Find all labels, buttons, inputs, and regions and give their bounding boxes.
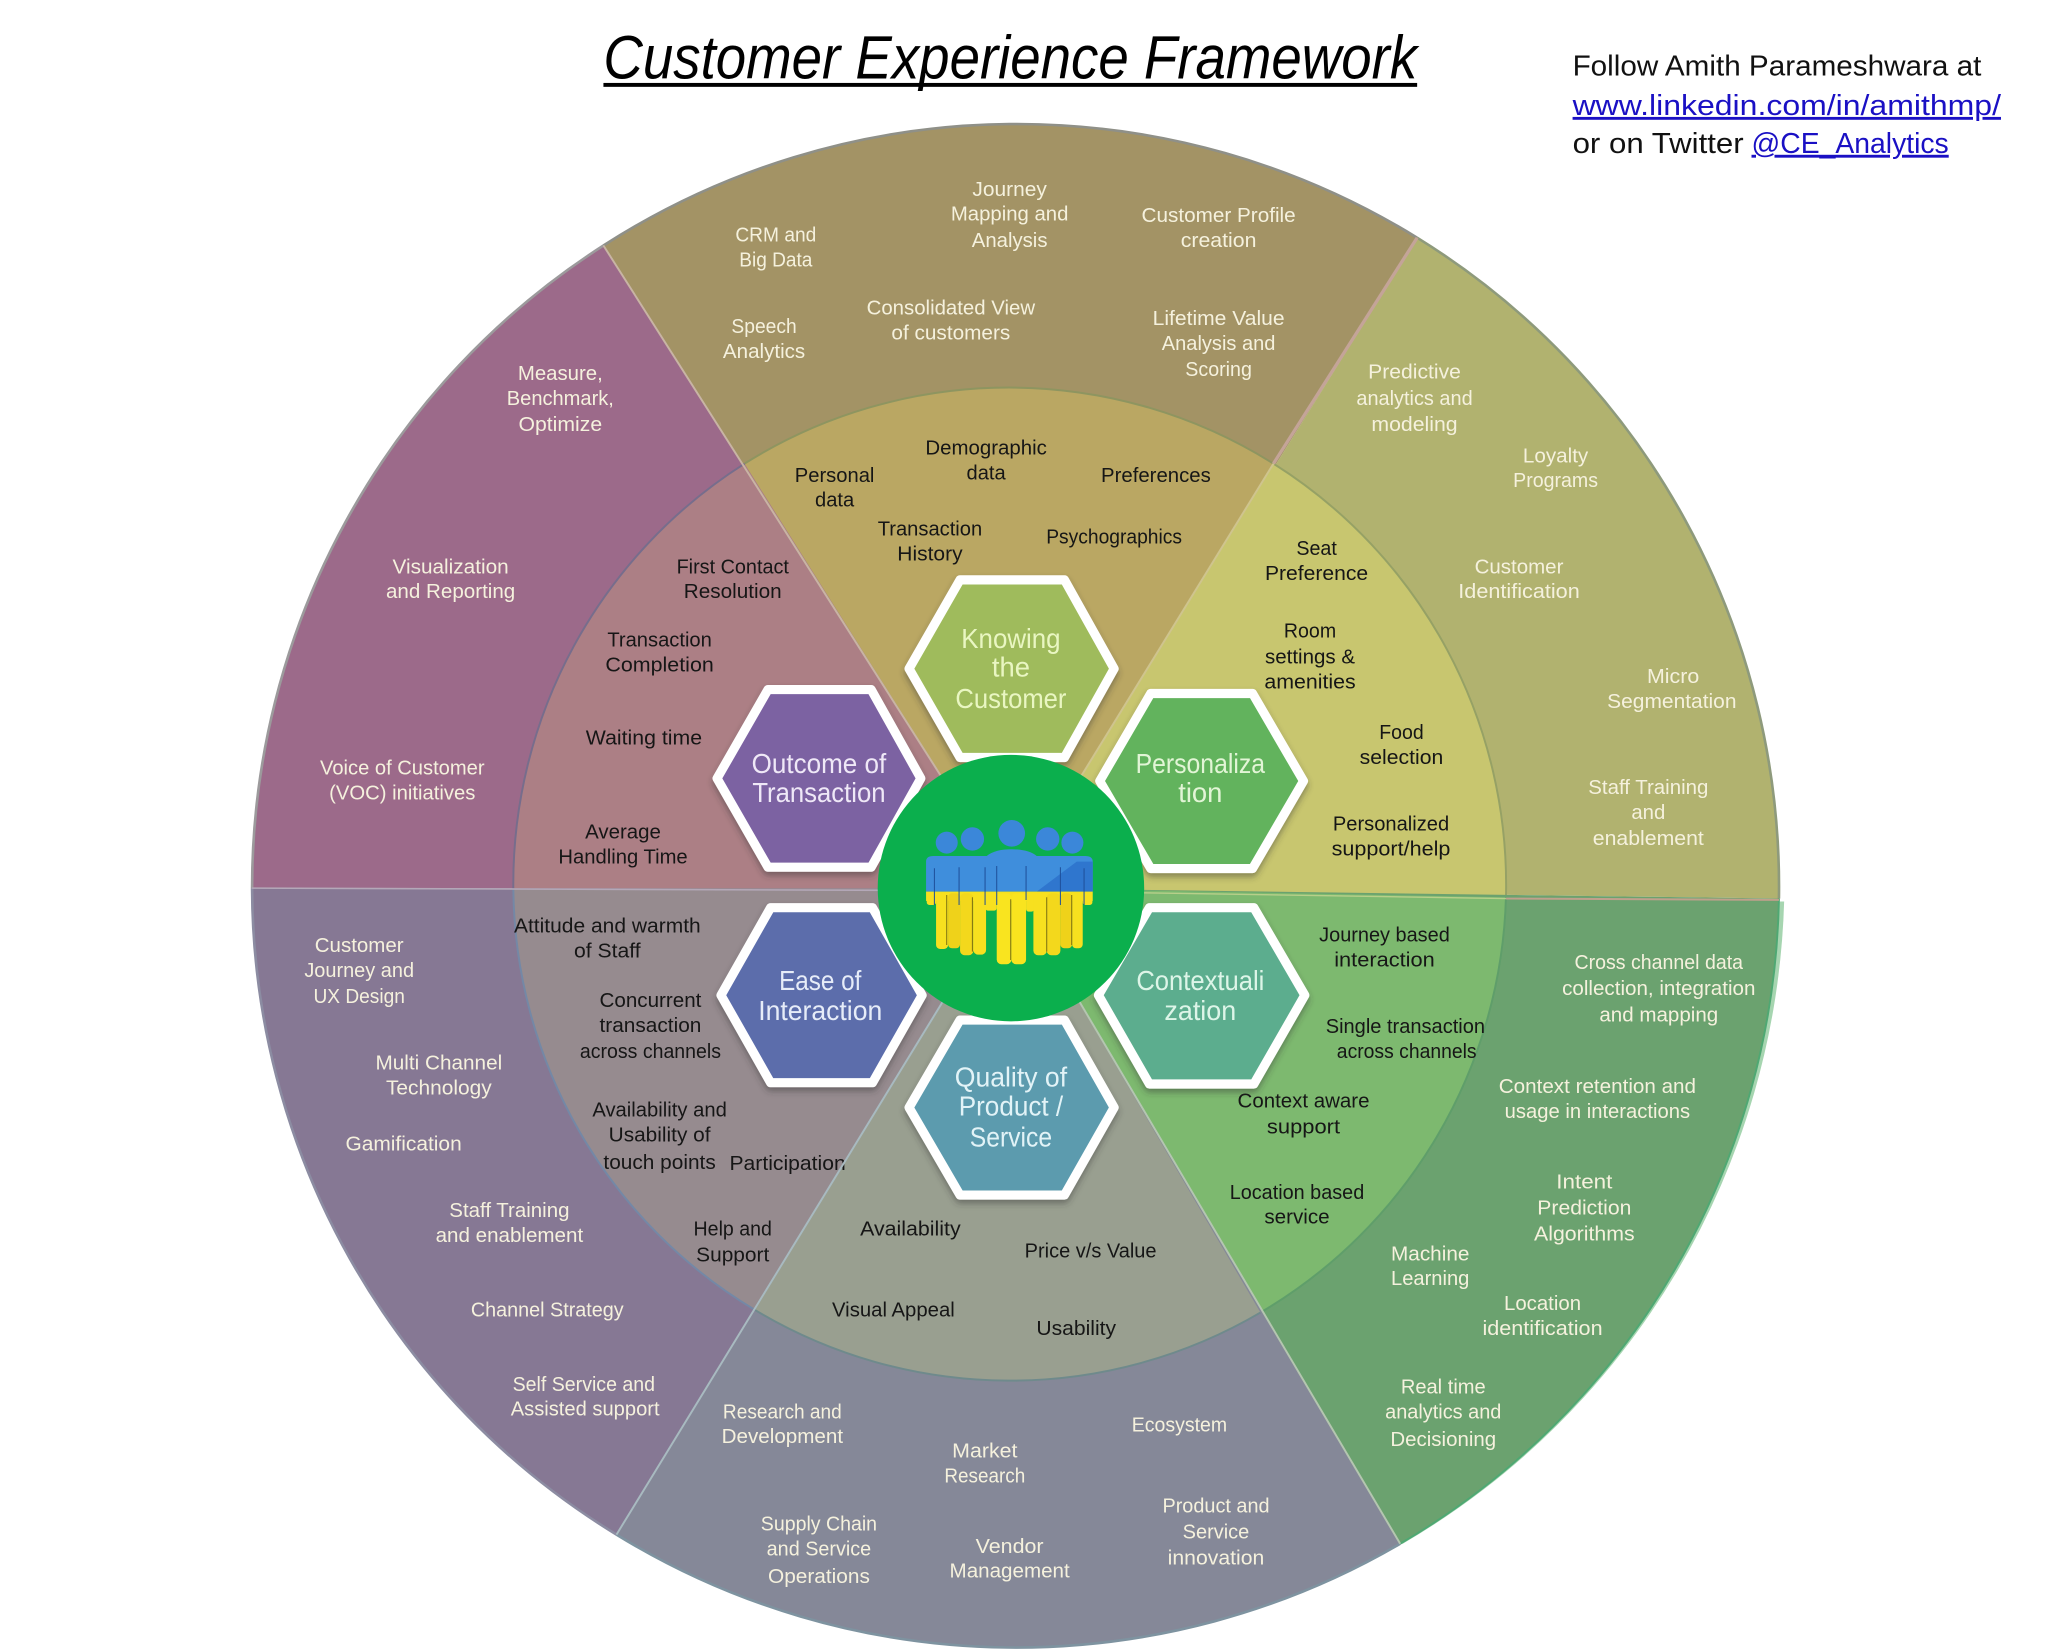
inner ring items: contextualization: service [1264,1207,1330,1229]
outer ring items: knowing the customer: Analysis [972,230,1048,252]
outer ring items: knowing the customer: creation [1181,230,1256,252]
inner ring items: contextualization: support [1267,1117,1340,1139]
center circle with people icon [878,755,1144,1021]
inner ring items: ease of interaction: of Staff [574,940,641,962]
hexagon: contextualization: Contextuali [1136,965,1264,996]
hexagon: knowing the customer [909,580,1114,757]
inner ring items: contextualization: Context aware [1238,1091,1369,1113]
outer ring items: knowing the customer: Mapping and [951,204,1068,226]
hexagon: knowing the customer: the [992,652,1030,683]
follow text block: Follow Amith Parameshwara at [1573,51,1981,83]
inner ring items: ease of interaction: across channels [580,1041,721,1063]
outer ring items: quality of product: and Service [767,1538,871,1560]
inner ring items: knowing the customer: Personal [795,465,874,487]
inner ring items: contextualization: across channels [1337,1041,1477,1063]
outer ring items: contextualization: Algorithms [1534,1224,1635,1246]
inner ring items: quality of product [832,1219,1157,1340]
inner ring items: personalization: Food [1379,722,1424,744]
outer ring items: personalization: Micro [1647,666,1699,688]
outer ring items: knowing the customer: CRM and [735,225,816,247]
outer ring items: personalization: Loyalty [1523,445,1589,467]
follow text block: or on Twitter [1573,128,1744,160]
outer ring items: knowing the customer: Analysis and [1162,333,1275,355]
inner ring items: outcome of transaction: First Contact [677,556,789,578]
outer ring items: quality of product: Ecosystem [1132,1414,1227,1436]
outer ring items: knowing the customer: Big Data [739,249,813,271]
inner ring items: contextualization: interaction [1334,949,1435,971]
inner ring items: personalization: selection [1360,747,1443,769]
hexagon: quality of product or service: Quality of [955,1062,1067,1093]
outer ring items: ease of interaction: and enablement [436,1225,584,1247]
hexagon: personalization: tion [1178,777,1222,808]
inner ring items: personalization: support/help [1332,838,1450,860]
outer ring items: contextualization: collection, integration [1562,978,1755,1000]
panel: ease of interaction sector [252,888,1012,1535]
inner ring items: outcome of transaction: Waiting time [586,727,702,749]
inner ring items: knowing the customer: History [897,543,964,565]
outer ring items: knowing the customer: Scoring [1185,359,1252,381]
inner ring items: ease of interaction: Concurrent [600,990,702,1012]
inner ring items: knowing the customer: Preferences [1101,465,1211,487]
outer ring items: outcome of transaction: Measure, [518,363,603,385]
outer ring items: quality of product: Market [952,1441,1018,1463]
outer ring items: personalization: Segmentation [1607,691,1736,713]
inner ring items: quality of product: Price v/s Value [1025,1241,1157,1263]
inner ring items: outcome of transaction: Average [585,821,661,843]
outer ring items: ease of interaction: Staff Training [449,1200,569,1222]
panel: contextualization sector [1012,888,1784,1544]
outer ring items: ease of interaction: Self Service and [513,1374,655,1396]
inner ring items: personalization: settings & [1265,646,1356,668]
outer ring items: personalization: Predictive [1368,362,1461,384]
inner ring items: quality of product: Usability [1036,1318,1117,1340]
outer ring items: personalization: Programs [1513,470,1598,492]
inner ring items: personalization: Seat [1296,538,1337,560]
inner ring items: personalization [1264,538,1450,860]
outer ring items: ease of interaction: Multi Channel [376,1053,502,1075]
outer ring items: contextualization: Cross channel data [1575,952,1744,974]
outer ring items: personalization: Identification [1458,581,1580,603]
outer ring items: ease of interaction [304,935,660,1421]
hexagon: ease of interaction [721,908,922,1083]
outer ring items: contextualization: Learning [1391,1268,1469,1290]
outer ring items: quality of product: Research [944,1465,1025,1487]
outer ring items: ease of interaction: Channel Strategy [471,1299,625,1321]
hexagon: contextualization: zation [1164,995,1236,1026]
inner ring items: ease of interaction: Participation [729,1153,846,1175]
hexagon: outcome of transaction: Outcome of [752,748,887,779]
follow text block [1571,51,2001,160]
inner ring items: knowing the customer: data [815,490,855,512]
inner ring items: ease of interaction [514,916,846,1267]
inner ring items: knowing the customer: data [967,462,1006,484]
outer ring items: contextualization: identification [1482,1318,1603,1340]
follow text block: www.linkedin.com/in/amithmp/ [1571,90,2001,122]
inner ring items: personalization: Room [1284,620,1336,642]
outer ring items: ease of interaction: Technology [386,1077,493,1099]
inner ring items: personalization: Preference [1265,563,1368,585]
hexagon: quality of product or service [909,1020,1114,1195]
inner ring items: ease of interaction: Support [696,1245,770,1267]
inner ring items: knowing the customer: Psychographics [1046,526,1182,548]
outer ring items: ease of interaction: Customer [315,935,404,957]
outer ring items: knowing the customer: Lifetime Value [1153,308,1285,330]
inner ring items: knowing the customer: Transaction [878,518,982,540]
outer ring items: contextualization: and mapping [1599,1004,1718,1026]
outer ring items: contextualization: Real time [1401,1377,1486,1399]
icon: group of people [926,820,1093,964]
outer ring items: contextualization [1385,952,1755,1451]
inner ring items: ease of interaction: Availability and [592,1100,727,1122]
outer ring items: personalization: Customer [1475,556,1564,578]
outer ring items: personalization: enablement [1593,828,1704,850]
outer ring items: contextualization: Decisioning [1390,1429,1496,1451]
inner ring items: quality of product: Visual Appeal [832,1299,955,1321]
outer ring items: contextualization: usage in interactions [1505,1101,1690,1123]
outer ring items: quality of product: Operations [768,1566,870,1588]
outer ring items: quality of product [722,1401,1270,1588]
hexagon: quality of product or service: Service [970,1122,1052,1153]
outer ring items: outcome of transaction [320,363,614,804]
inner ring items: ease of interaction: transaction [600,1015,701,1037]
inner ring items: outcome of transaction: Transaction [607,629,712,651]
outer ring items: contextualization: Context retention and [1499,1076,1696,1098]
outer ring items: ease of interaction: UX Design [313,986,405,1008]
follow text block: @CE_Analytics [1752,128,1949,160]
inner ring items: outcome of transaction: Resolution [684,581,782,603]
outer ring items: outcome of transaction: Optimize [519,414,602,436]
outer ring items: personalization: analytics and [1356,388,1473,410]
outer ring items: knowing the customer: Journey [972,179,1048,201]
outer ring items: contextualization: analytics and [1385,1401,1501,1423]
outer ring items: outcome of transaction: and Reporting [386,581,515,603]
outer ring items: personalization: and [1631,802,1665,824]
outer ring items: outcome of transaction: (VOC) initiatives [329,782,475,804]
panel: knowing the customer sector [603,124,1417,888]
inner ring items: contextualization: Single transaction [1326,1016,1485,1038]
outer ring items: knowing the customer: Customer Profile [1142,205,1296,227]
hexagon: outcome of transaction [717,690,921,867]
hexagon: personalization: Personaliza [1136,748,1266,779]
outer ring items: quality of product: Management [950,1561,1070,1583]
inner ring items: ease of interaction: Help and [694,1219,772,1241]
outer ring items: quality of product: Vendor [976,1536,1044,1558]
title: Customer Experience Framework [603,23,1420,92]
outer ring items: knowing the customer: Consolidated View [867,298,1035,320]
inner ring items: outcome of transaction: Handling Time [558,846,688,868]
outer ring items: ease of interaction: Assisted support [511,1399,660,1421]
hexagon: ease of interaction: Ease of [779,965,862,996]
hexagon: quality of product or service: Product / [959,1090,1064,1121]
outer ring items: quality of product: Research and [723,1401,842,1423]
outer ring items: outcome of transaction: Voice of Customer [320,757,485,779]
hexagon: outcome of transaction: Transaction [752,777,886,808]
outer ring items: personalization: Staff Training [1588,777,1708,799]
hexagon: contextualization [1098,908,1305,1084]
outer ring items: contextualization: Intent [1556,1171,1613,1193]
outer ring items: quality of product: Supply Chain [761,1514,877,1536]
outer ring items: contextualization: Location [1504,1293,1581,1315]
outer ring items: knowing the customer: Speech [731,316,797,338]
outer ring items: outcome of transaction: Visualization [392,556,509,578]
outer ring items: outcome of transaction: Benchmark, [507,388,614,410]
hexagon: knowing the customer: Customer [955,683,1066,714]
hexagon: ease of interaction: Interaction [758,995,882,1026]
inner ring items: knowing the customer: Demographic [925,437,1047,459]
outer ring items: personalization: modeling [1371,414,1458,436]
inner ring items: contextualization: Journey based [1319,925,1450,947]
panel: quality of product sector [616,888,1400,1648]
hexagon: knowing the customer: Knowing [961,623,1061,654]
outer ring items: quality of product: Service [1183,1522,1249,1544]
outer ring items: knowing the customer [723,179,1296,381]
outer ring items: knowing the customer: of customers [891,323,1010,345]
outer ring items: quality of product: Development [722,1426,843,1448]
inner ring items: personalization: amenities [1264,671,1356,693]
inner ring items: personalization: Personalized [1333,814,1449,836]
inner ring items: outcome of transaction: Completion [605,654,714,676]
inner ring items: knowing the customer [795,437,1211,565]
panel: personalization sector [1012,238,1779,899]
outer ring items: ease of interaction: Gamification [345,1134,462,1156]
outer ring items: knowing the customer: Analytics [723,341,805,363]
hexagon: personalization [1100,694,1304,869]
inner ring items: ease of interaction: Attitude and warmth [514,916,701,938]
inner ring items: quality of product: Availability [860,1219,962,1241]
inner ring items: outcome of transaction [558,556,789,868]
outer ring items: ease of interaction: Journey and [304,960,414,982]
outer ring items: contextualization: Machine [1391,1243,1469,1265]
inner ring items: contextualization: Location based [1230,1182,1364,1204]
outer ring items: quality of product: Product and [1162,1495,1270,1517]
inner ring items: ease of interaction: Usability of [609,1124,711,1146]
inner ring items: contextualization [1230,925,1485,1229]
inner ring items: ease of interaction: touch points [603,1152,716,1174]
panel: outcome of transaction sector [252,246,1012,888]
outer ring items: quality of product: innovation [1168,1548,1264,1570]
outer ring items: contextualization: Prediction [1537,1198,1631,1220]
outer ring items: personalization [1356,362,1736,850]
